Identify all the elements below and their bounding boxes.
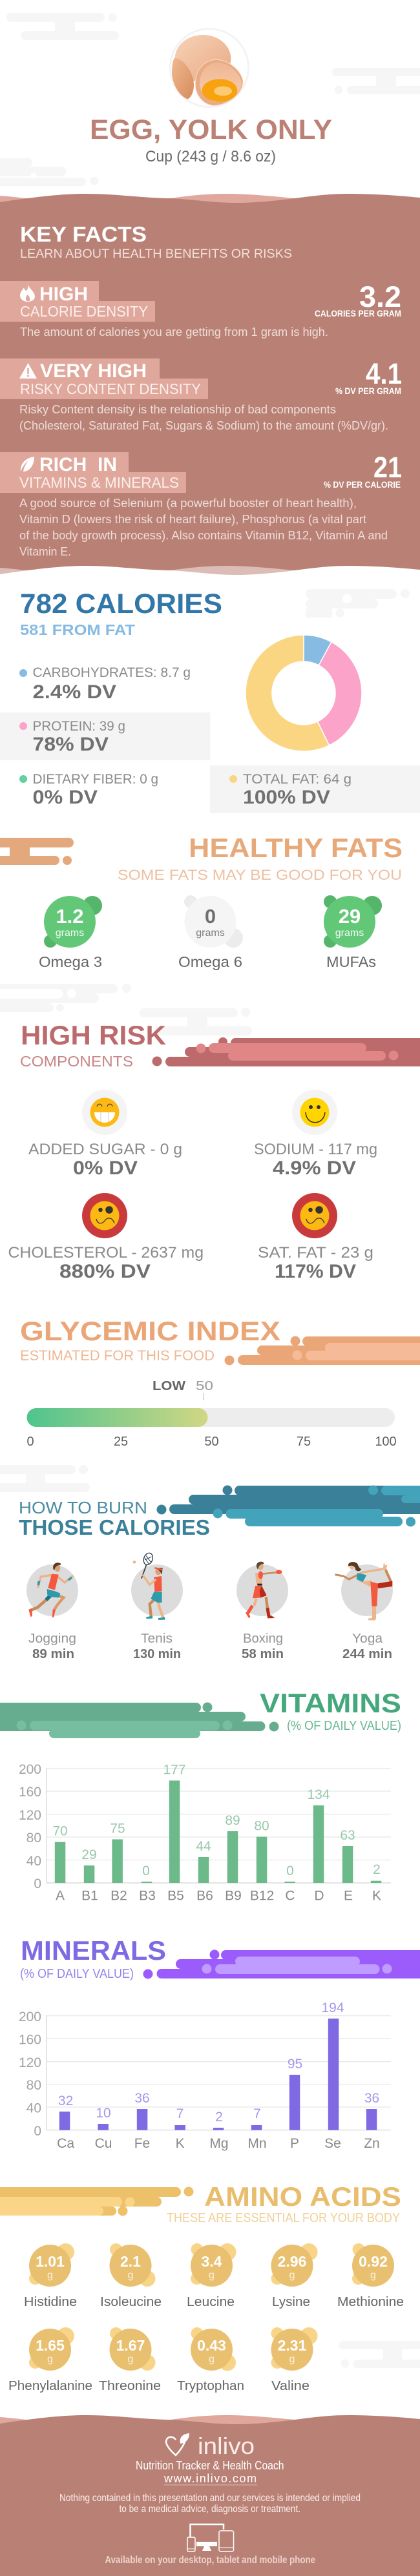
risk: sodium: SODIUM - 117 mg: [254, 1141, 377, 1158]
amino: threonine: Threonine: [99, 2379, 161, 2393]
fact: risky content density: VERY HIGH: [40, 360, 147, 382]
bar chart: vitamins: B2: [110, 1889, 127, 1903]
bar chart: vitamins: 160: [19, 1785, 41, 1800]
legend: total fat: TOTAL FAT: 64 g: [243, 772, 352, 787]
icon: yoga pose: [335, 1562, 392, 1620]
bar chart: vitamins: B6: [196, 1889, 213, 1903]
activity label: jogging: Jogging: [28, 1632, 76, 1646]
fact: calorie density: The amount of calories you are getting from 1 gram is high.: [20, 326, 328, 338]
amino: isoleucine: Isoleucine: [100, 2295, 162, 2309]
risk: added sugar: ADDED SUGAR - 0 g: [28, 1141, 182, 1158]
key facts heading: KEY FACTS: [20, 222, 147, 246]
legend: protein: PROTEIN: 39 g: [32, 719, 125, 734]
icon: grinning face: [90, 1098, 119, 1127]
badge: omega 3: [39, 896, 102, 970]
disclaimer: Nothing contained in this presentation and our services is intended or implied: [59, 2493, 361, 2504]
gauge scale: 100: [375, 1435, 397, 1449]
bar chart: vitamins: 120: [19, 1808, 41, 1823]
legend: dietary fiber: [19, 772, 158, 808]
band: burn calories: [156, 1486, 420, 1527]
subheading: healthy fats: SOME FATS MAY BE GOOD FOR YOU: [118, 867, 402, 883]
legend: protein: [0, 712, 211, 760]
tagline: Nutrition Tracker & Health Coach: [136, 2459, 284, 2472]
gauge scale: 75: [297, 1435, 311, 1449]
gauge scale: 0: [26, 1435, 34, 1449]
panel: vitamins: [0, 1688, 401, 1903]
amino: phenylalanine: g: [47, 2354, 53, 2365]
band: glycemic index: [225, 1336, 420, 1366]
risk: sodium: [254, 1090, 377, 1179]
icon: sick face: [300, 1201, 330, 1230]
activity: boxing: [236, 1562, 288, 1619]
activity label: tennis: Tenis: [141, 1632, 173, 1646]
subheading: percent daily value: (% OF DAILY VALUE): [287, 1719, 401, 1733]
amino: methionine: Methionine: [337, 2295, 404, 2309]
fact: rich in vitamins and minerals: Vitamin E.: [19, 545, 71, 558]
bar chart: minerals: Ca: [57, 2136, 74, 2151]
bar chart: vitamins: 134: [307, 1787, 330, 1802]
icon: sick face: [90, 1201, 119, 1230]
amino: lysine: 2.96: [278, 2253, 306, 2270]
fact: risky content density: (Cholesterol, Saturated Fat, Sugars & Sodium) to the amount (%DV/gr).: [19, 419, 388, 432]
activity label: tennis: 130 min: [133, 1647, 181, 1661]
activity label: yoga: [342, 1632, 392, 1661]
bar chart: vitamins: B1: [81, 1889, 98, 1903]
bar chart: minerals: Se: [324, 2136, 341, 2151]
gauge scale: 50: [204, 1435, 219, 1449]
bar chart: minerals: 2: [215, 2110, 223, 2124]
band: amino acids: [0, 2187, 194, 2216]
panel: healthy fats: [0, 833, 403, 970]
panel: key facts: [0, 194, 420, 585]
bar chart: vitamins: B3: [139, 1889, 156, 1903]
bar chart: minerals: Cu: [95, 2136, 112, 2151]
fact: rich in vitamins and minerals: 21: [373, 451, 402, 484]
disclaimer: [59, 2493, 361, 2515]
legend: carbohydrates: CARBOHYDRATES: 8.7 g: [32, 665, 191, 680]
bar chart: vitamins: A: [56, 1889, 65, 1903]
amino: phenylalanine: 1.65: [36, 2337, 65, 2354]
amino: lysine: Lysine: [272, 2295, 310, 2309]
bar chart: minerals: P: [290, 2136, 299, 2151]
subheading: estimated: ESTIMATED FOR THIS FOOD: [20, 1347, 215, 1364]
heading: glycemic index: GLYCEMIC INDEX: [20, 1316, 280, 1346]
activity label: boxing: Boxing: [243, 1632, 283, 1646]
badge: omega 3: 1.2: [56, 905, 84, 928]
panel: footer: [0, 2415, 420, 2576]
fact: risky content density: [0, 357, 402, 432]
badge: mufas: [324, 895, 382, 970]
bar chart: vitamins: 44: [196, 1839, 211, 1854]
risk: cholesterol: 880% DV: [59, 1261, 151, 1282]
amino: lysine: g: [289, 2270, 295, 2281]
bar chart: minerals: 7: [253, 2106, 261, 2121]
legend: total fat: 100% DV: [243, 787, 330, 808]
risk: cholesterol: CHOLESTEROL - 2637 mg: [8, 1244, 204, 1262]
panel: how to burn: [19, 1486, 420, 1661]
amino: phenylalanine: Phenylalanine: [8, 2379, 92, 2393]
bar chart: minerals: 32: [58, 2093, 73, 2108]
subheading: essential: THESE ARE ESSENTIAL FOR YOUR BODY: [167, 2211, 400, 2225]
amino: leucine: 3.4: [202, 2253, 222, 2270]
key facts subheading: LEARN ABOUT HEALTH BENEFITS OR RISKS: [20, 247, 292, 261]
fact: calorie density: [0, 280, 401, 338]
amino: histidine: 1.01: [36, 2253, 65, 2270]
amino: methionine: g: [370, 2270, 376, 2281]
amino: tryptophan: Tryptophan: [177, 2379, 244, 2393]
bar chart: vitamins: 29: [81, 1847, 97, 1862]
activity label: boxing: [242, 1632, 284, 1661]
badge: omega 6: 0: [205, 905, 216, 928]
gauge scale: 25: [114, 1435, 128, 1449]
fact: rich in vitamins and minerals: Vitamin D (lowers the risk of heart failure), Phosphorus (a vital part: [19, 513, 366, 526]
bar chart: vitamins: E: [344, 1889, 353, 1903]
heading: healthy fats: HEALTHY FATS: [189, 833, 403, 863]
serving size: Cup (243 g / 8.6 oz): [145, 148, 276, 165]
amino: leucine: [187, 2243, 236, 2309]
amino: valine: [271, 2327, 318, 2393]
activity: jogging: [26, 1563, 78, 1617]
amino: threonine: [99, 2327, 161, 2393]
risk: saturated fat: SAT. FAT - 23 g: [258, 1244, 373, 1262]
fact: rich in vitamins and minerals: A good source of Selenium (a powerful booster of heart health),: [19, 497, 357, 510]
activity label: jogging: [28, 1632, 76, 1661]
donut chart: [246, 635, 362, 751]
amino: tryptophan: [177, 2327, 244, 2393]
activity label: jogging: 89 min: [32, 1647, 74, 1661]
fact: rich in vitamins and minerals: [0, 451, 402, 558]
amino: leucine: g: [209, 2270, 215, 2281]
egg photo: [171, 28, 248, 107]
amino: valine: Valine: [271, 2379, 310, 2393]
heading: amino acids: AMINO ACIDS: [204, 2181, 401, 2212]
gauge bar: [27, 1408, 395, 1427]
bar chart: minerals: 160: [19, 2032, 41, 2048]
risk: saturated fat: [258, 1193, 373, 1282]
panel: glycemic index: [20, 1316, 420, 1449]
amino: methionine: 0.92: [359, 2253, 388, 2270]
bar chart: vitamins: 89: [225, 1813, 240, 1828]
badge: mufas: grams: [335, 928, 364, 939]
bar chart: minerals: K: [176, 2136, 185, 2151]
amino: tryptophan: 0.43: [197, 2337, 226, 2354]
heading: high risk: HIGH RISK: [21, 1020, 166, 1050]
subheading: components: COMPONENTS: [20, 1053, 133, 1070]
badge: omega 3: Omega 3: [39, 953, 102, 970]
bar chart: vitamins: 0: [286, 1864, 294, 1878]
logo: inlivo: inlivo: [198, 2433, 255, 2459]
bar chart: minerals: 200: [19, 2010, 41, 2024]
bar chart: minerals: 95: [288, 2057, 302, 2072]
bar chart: minerals: 120: [19, 2055, 41, 2070]
fact: risky content density: RISKY CONTENT DENSITY: [20, 380, 201, 397]
bar chart: vitamins: 75: [110, 1822, 125, 1836]
bar chart: vitamins: 80: [254, 1819, 269, 1833]
amino: phenylalanine: [8, 2327, 92, 2393]
bar chart: vitamins: B5: [167, 1889, 184, 1903]
activity label: boxing: 58 min: [242, 1647, 284, 1661]
subheading: calories from fat: 581 FROM FAT: [20, 621, 135, 638]
band: high risk: [152, 1037, 420, 1066]
bar chart: minerals: Zn: [364, 2136, 380, 2151]
legend: dietary fiber: DIETARY FIBER: 0 g: [32, 772, 158, 787]
heading: minerals: MINERALS: [21, 1935, 166, 1966]
bar chart: vitamins: C: [285, 1889, 295, 1903]
bar chart: vitamins: D: [314, 1889, 324, 1903]
bar chart: minerals: 80: [26, 2078, 41, 2093]
bar chart: vitamins: [19, 1762, 391, 1903]
legend: protein: 78% DV: [32, 734, 109, 755]
bar chart: vitamins: B9: [225, 1889, 242, 1903]
amino: isoleucine: [100, 2243, 162, 2309]
amino: tryptophan: g: [209, 2354, 215, 2365]
fact: rich in vitamins and minerals: RICH IN: [39, 454, 117, 475]
bar chart: vitamins: 40: [26, 1854, 41, 1869]
panel: amino acids: [0, 2181, 404, 2393]
badge: mufas: 29: [339, 905, 361, 928]
icon: runner: [28, 1563, 73, 1617]
heading: those calories: THOSE CALORIES: [19, 1515, 210, 1539]
bar chart: minerals: 10: [96, 2106, 111, 2121]
risk: added sugar: [28, 1090, 182, 1179]
badge: omega 6: grams: [196, 928, 225, 939]
risk: sodium: 4.9% DV: [273, 1158, 356, 1179]
icon: boxer: [246, 1562, 282, 1619]
fact: calorie density: CALORIES PER GRAM: [315, 308, 401, 318]
fact: calorie density: HIGH: [39, 284, 88, 305]
disclaimer: to be a medical advice, diagnosis or treatment.: [119, 2504, 300, 2515]
bar chart: minerals: Mn: [247, 2136, 267, 2151]
badge: omega 3: grams: [56, 928, 84, 939]
activity: yoga: [335, 1562, 393, 1620]
availability note: Available on your desktop, tablet and mobile phone: [105, 2555, 315, 2566]
legend: dietary fiber: 0% DV: [32, 787, 98, 808]
fact: rich in vitamins and minerals: of the body growth process). Also contains Vitamin B12, Vitamin A and: [19, 529, 388, 542]
bar chart: minerals: 40: [26, 2101, 41, 2116]
bar chart: vitamins: K: [372, 1889, 381, 1903]
activity label: tennis: [133, 1632, 181, 1661]
logo: inlivo: [166, 2433, 255, 2459]
amino: isoleucine: g: [128, 2270, 133, 2281]
icon: devices: [187, 2524, 234, 2551]
bar chart: vitamins: B12: [250, 1889, 274, 1903]
activity label: yoga: 244 min: [342, 1647, 392, 1661]
heading: vitamins: VITAMINS: [260, 1688, 401, 1718]
panel: high risk: [8, 1020, 420, 1282]
icon: leaf: [21, 457, 34, 472]
bar chart: minerals: [19, 2000, 391, 2151]
bar chart: minerals: Mg: [209, 2136, 229, 2151]
gauge scale: [26, 1435, 397, 1449]
fact: rich in vitamins and minerals: VITAMINS & MINERALS: [19, 474, 179, 491]
panel: glycemic index: 50: [196, 1379, 213, 1393]
title: EGG, YOLK ONLY: [90, 114, 332, 145]
amino: isoleucine: 2.1: [120, 2253, 141, 2270]
legend: total fat: [210, 765, 420, 813]
icon: smiling face: [300, 1098, 330, 1127]
heading: how to burn: HOW TO BURN: [19, 1498, 147, 1517]
legend: carbohydrates: [19, 665, 191, 703]
bar chart: vitamins: 177: [163, 1762, 186, 1778]
icon: tennis player: [133, 1552, 165, 1620]
activity: tennis: [131, 1552, 183, 1620]
amino: histidine: Histidine: [24, 2295, 77, 2309]
bar chart: vitamins: 80: [26, 1831, 41, 1845]
amino: valine: 2.31: [278, 2337, 307, 2354]
bar chart: vitamins: 200: [19, 1762, 41, 1777]
website link: www.inlivo.com: [163, 2472, 257, 2485]
fact: risky content density: Risky Content density is the relationship of bad components: [19, 403, 336, 416]
panel: minerals: [19, 1935, 420, 2151]
amino: histidine: [24, 2243, 77, 2309]
gauge label: LOW: [152, 1379, 185, 1393]
risk: cholesterol: [8, 1193, 204, 1282]
icon: warning triangle: [19, 363, 37, 379]
heading: calories: 782 CALORIES: [20, 588, 222, 619]
amino: methionine: [337, 2243, 404, 2309]
icon: flame: [20, 284, 35, 302]
amino: threonine: 1.67: [116, 2337, 145, 2354]
bar chart: minerals: 36: [364, 2091, 379, 2106]
bar chart: minerals: Fe: [134, 2136, 150, 2151]
amino: valine: g: [289, 2354, 295, 2365]
bar chart: vitamins: 63: [340, 1828, 355, 1843]
risk: added sugar: 0% DV: [73, 1158, 138, 1179]
legend: carbohydrates: 2.4% DV: [32, 681, 116, 703]
amino: leucine: Leucine: [187, 2295, 235, 2309]
badge: omega 6: Omega 6: [178, 953, 242, 970]
band: vitamins: [0, 1703, 279, 1738]
fact: rich in vitamins and minerals: % DV PER CALORIE: [324, 479, 401, 490]
bar chart: vitamins: 0: [34, 1876, 41, 1891]
bar chart: minerals: 36: [134, 2091, 150, 2106]
amino: lysine: [271, 2243, 318, 2309]
bar chart: minerals: 0: [34, 2124, 41, 2139]
fact: risky content density: % DV PER GRAM: [335, 386, 401, 396]
bar chart: minerals: 194: [321, 2000, 344, 2015]
amino: histidine: g: [47, 2270, 53, 2281]
fact: calorie density: 3.2: [359, 280, 401, 313]
band: minerals: [143, 1949, 420, 1979]
band: healthy fats: [0, 838, 74, 865]
bar chart: vitamins: 0: [142, 1864, 150, 1878]
amino: threonine: g: [128, 2354, 133, 2365]
bar chart: minerals: 7: [176, 2106, 184, 2121]
bar chart: vitamins: 70: [52, 1824, 68, 1838]
bar chart: vitamins: 2: [373, 1862, 381, 1877]
fact: risky content density: 4.1: [366, 357, 402, 390]
subheading: percent daily value: (% OF DAILY VALUE): [20, 1967, 134, 1981]
fact: calorie density: CALORIE DENSITY: [20, 303, 148, 320]
risk: saturated fat: 117% DV: [275, 1261, 356, 1282]
badge: omega 6: [178, 895, 243, 970]
activity label: yoga: Yoga: [352, 1632, 383, 1646]
badge: mufas: MUFAs: [326, 953, 376, 970]
